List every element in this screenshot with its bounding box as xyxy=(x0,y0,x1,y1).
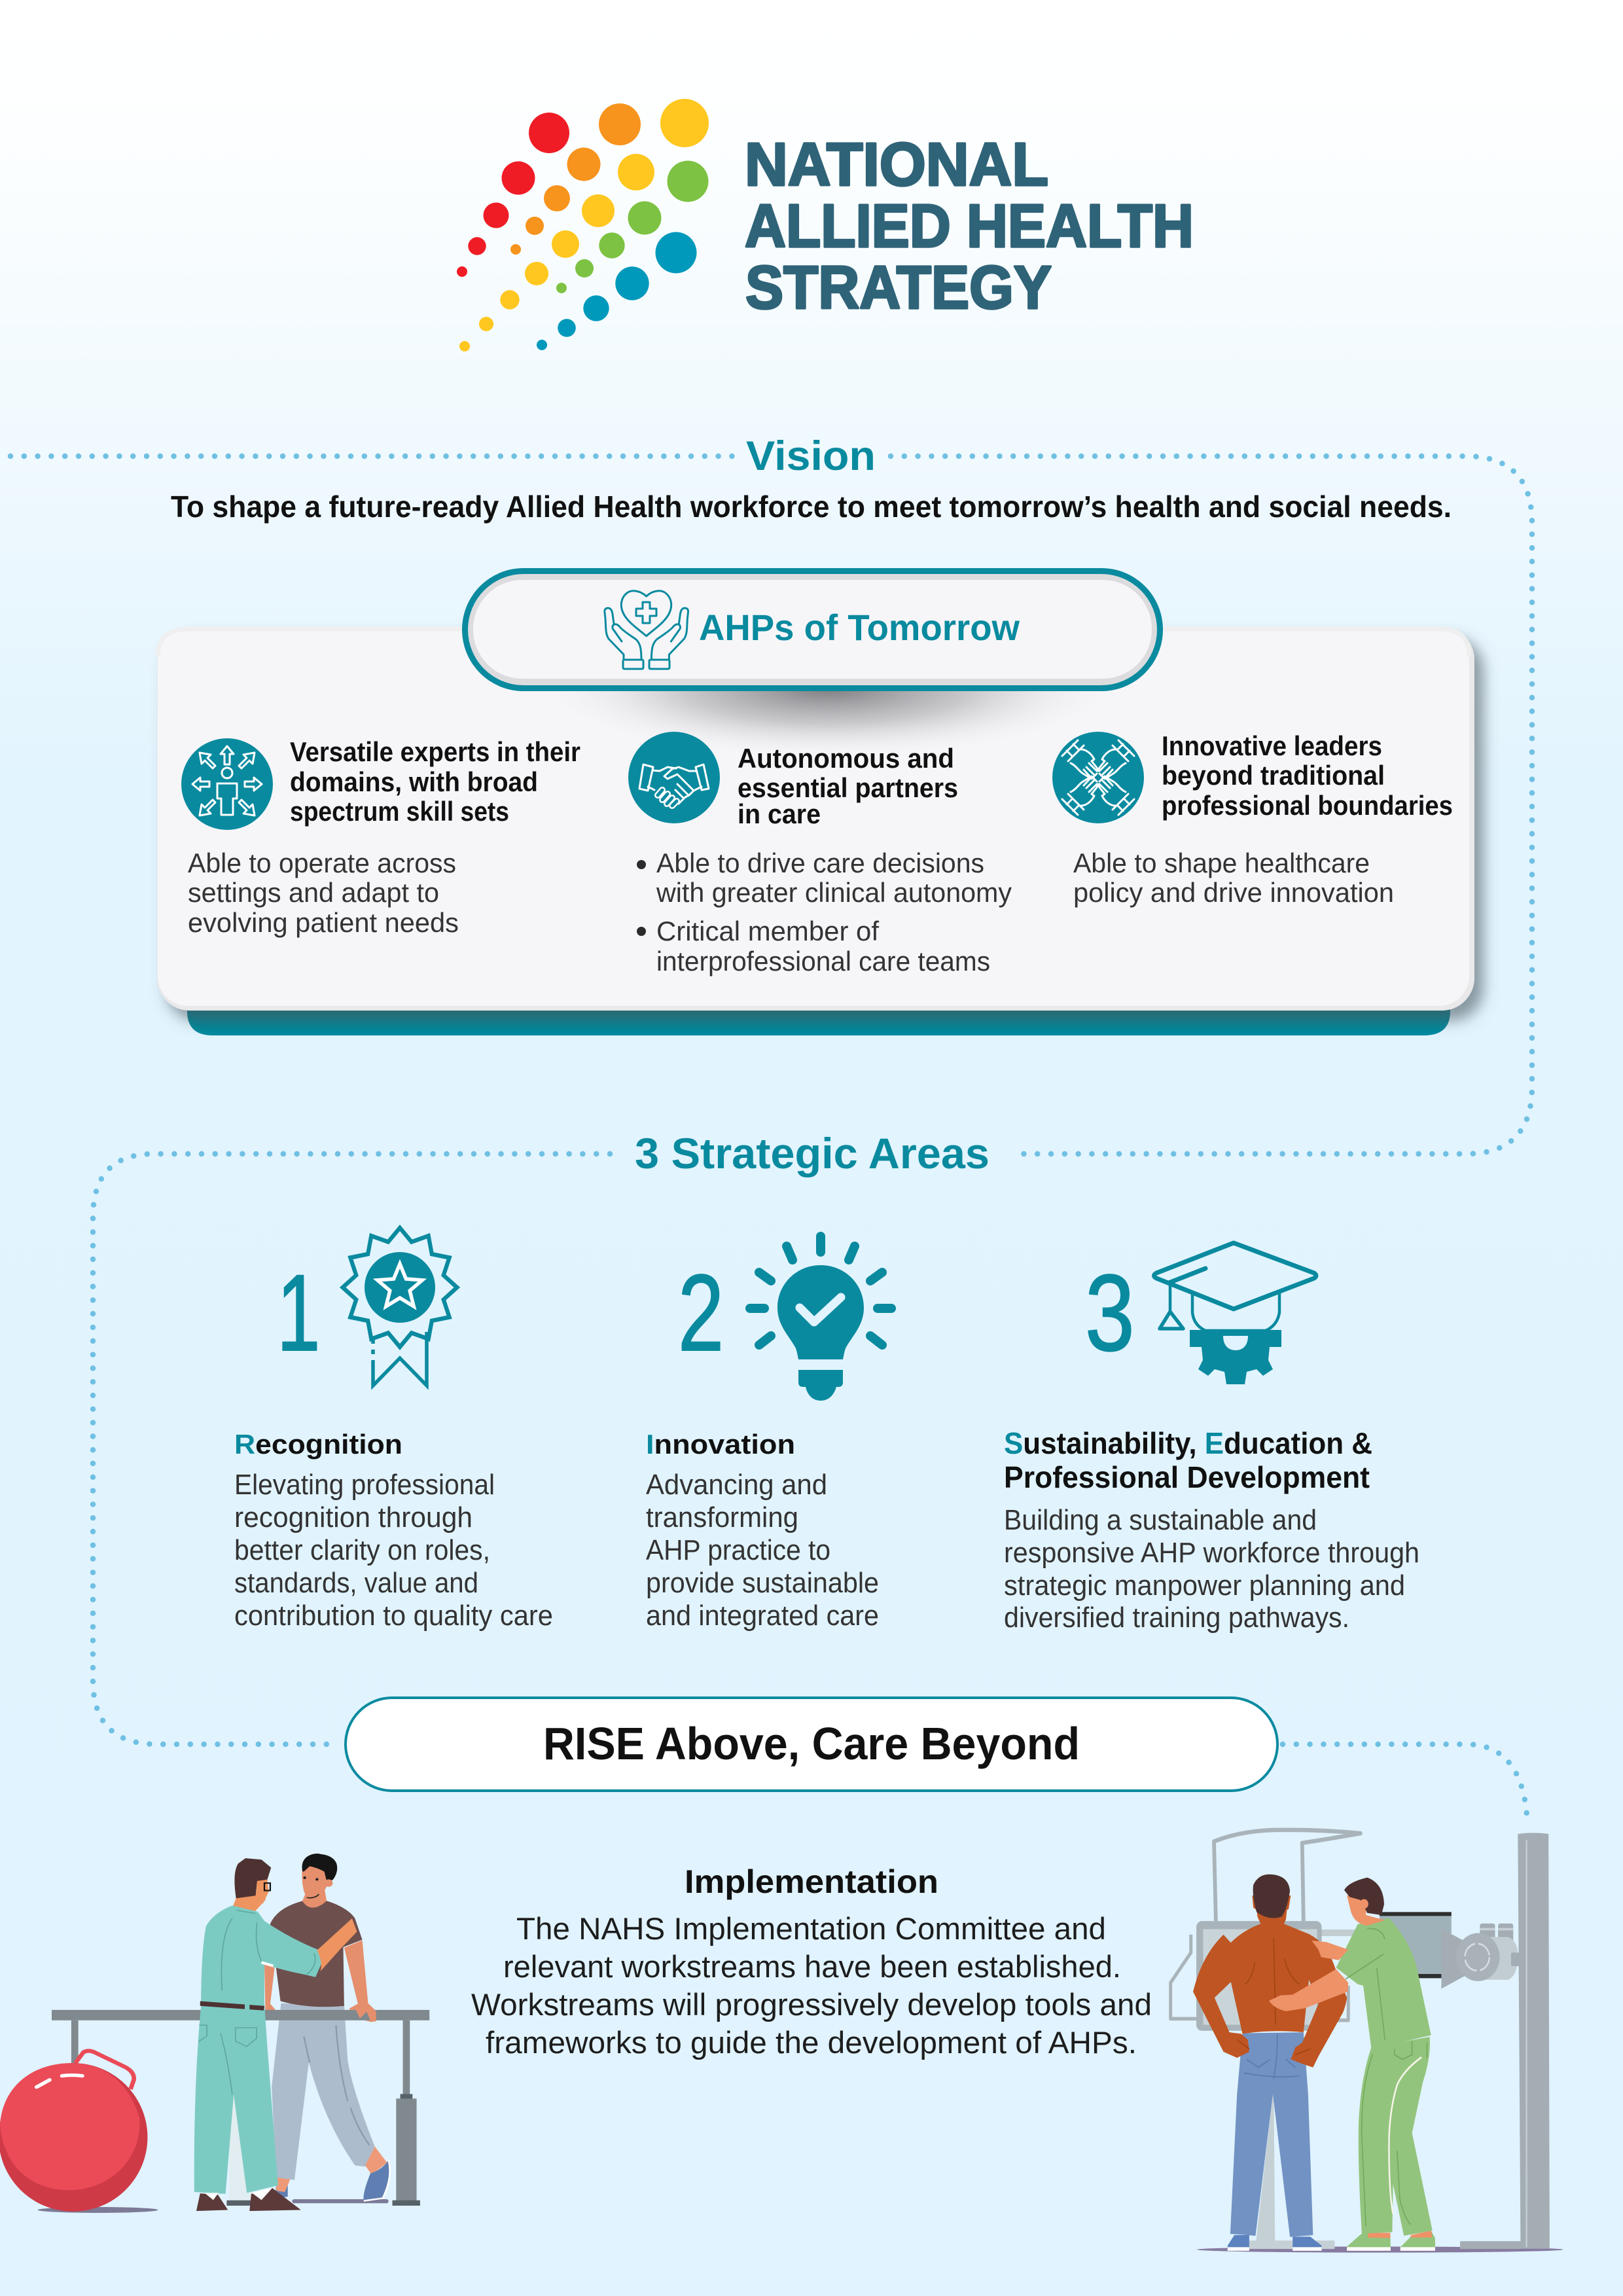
logo: wordmark: STRATEGY xyxy=(745,253,1052,321)
column heading xyxy=(738,743,958,829)
area text: transforming xyxy=(646,1501,798,1534)
parallel bar post right xyxy=(71,2020,420,2206)
column text: Able to operate across xyxy=(188,848,456,878)
pill title: AHPs of Tomorrow xyxy=(699,607,1020,648)
area heading xyxy=(1004,1426,1372,1494)
area text: better clarity on roles, xyxy=(234,1534,490,1566)
column text: settings and adapt to xyxy=(188,877,439,908)
numeral 2: 2 xyxy=(678,1253,724,1374)
column text: policy and drive innovation xyxy=(1073,877,1394,908)
logo: coloured dots xyxy=(457,99,709,351)
column heading: in care xyxy=(738,798,821,829)
column heading: Innovative leaders xyxy=(1162,730,1382,761)
icon: award rosette xyxy=(343,1228,457,1386)
area heading: Recognition xyxy=(234,1429,402,1460)
bullet list: Able to drive care decisions xyxy=(656,848,984,878)
panel base bar xyxy=(187,982,1450,1035)
area text: diversified training pathways. xyxy=(1004,1602,1349,1634)
area heading: Professional Development xyxy=(1004,1460,1370,1494)
area heading: Sustainability, Education & xyxy=(1004,1426,1372,1460)
implementation text xyxy=(471,1863,1152,2060)
pill drop shadow xyxy=(540,618,1116,759)
tagline pill xyxy=(346,1698,1277,1791)
column text: Able to shape healthcare xyxy=(1073,848,1370,878)
illustration: radiographer with patient at x-ray machine xyxy=(1171,1830,1563,2253)
implementation body: Workstreams will progressively develop tools and xyxy=(471,1987,1152,2022)
area text: and integrated care xyxy=(646,1600,879,1632)
column heading: domains, with broad xyxy=(290,766,538,797)
area text: recognition through xyxy=(234,1501,473,1534)
area text: Building a sustainable and xyxy=(1004,1504,1317,1536)
logo: wordmark xyxy=(745,130,1194,321)
area text: standards, value and xyxy=(234,1567,478,1599)
parallel bar rail xyxy=(52,2010,429,2020)
card xyxy=(157,627,1474,1011)
patient right hand xyxy=(355,2004,376,2022)
implementation body xyxy=(471,1911,1152,2060)
icon: handshake xyxy=(628,732,720,823)
area heading: Innovation xyxy=(646,1429,795,1460)
numeral 3: 3 xyxy=(1085,1253,1135,1374)
area text: Elevating professional xyxy=(234,1469,495,1501)
implementation body: frameworks to guide the development of AHPs. xyxy=(486,2025,1137,2060)
area text xyxy=(1004,1504,1419,1634)
area text: AHP practice to xyxy=(646,1534,830,1566)
icon: hands holding heart xyxy=(605,591,688,669)
column heading xyxy=(290,736,580,827)
vision statement: To shape a future-ready Allied Health workforce to meet tomorrow’s health and social needs. xyxy=(171,490,1452,524)
column heading: beyond traditional xyxy=(1162,760,1385,791)
column text xyxy=(188,848,459,938)
area text: strategic manpower planning and xyxy=(1004,1570,1405,1602)
radiographer xyxy=(1269,1878,1435,2251)
therapist xyxy=(194,1858,357,2211)
area 3: Sustainability, Education and Professional Development xyxy=(1004,1426,1419,1634)
heading: Vision: Vision xyxy=(746,433,876,479)
area text xyxy=(646,1469,879,1632)
panel: AHPs of Tomorrow xyxy=(157,568,1474,1035)
tagline pill: RISE Above, Care Beyond xyxy=(543,1718,1080,1769)
bullet list xyxy=(637,848,1012,977)
logo: wordmark: NATIONAL xyxy=(745,130,1048,198)
x-ray tube assembly xyxy=(1380,1912,1518,1988)
heading: 3 Strategic Areas: 3 Strategic Areas xyxy=(635,1129,990,1177)
numeral 1: 1 xyxy=(277,1252,320,1374)
column text: evolving patient needs xyxy=(188,907,459,938)
column 1: versatile experts xyxy=(181,736,580,938)
bullet list: Critical member of xyxy=(656,916,879,946)
implementation body: The NAHS Implementation Committee and xyxy=(516,1911,1106,1946)
column 2: autonomous partners xyxy=(628,732,1012,977)
icon: light bulb with tick xyxy=(750,1236,891,1401)
column heading: Versatile experts in their xyxy=(290,736,580,767)
bullet list: with greater clinical autonomy xyxy=(656,877,1012,908)
icon: graduation cap with gear xyxy=(1154,1243,1316,1384)
column 3: innovative leaders xyxy=(1052,730,1453,908)
heading pill xyxy=(462,568,1163,691)
icon: four joined hands xyxy=(1052,732,1144,823)
area text: contribution to quality care xyxy=(234,1600,553,1632)
column text xyxy=(1073,848,1394,908)
column heading: essential partners xyxy=(738,772,958,803)
detector frame xyxy=(1171,1830,1364,2249)
icon: person with arrows xyxy=(181,738,273,830)
column heading: spectrum skill sets xyxy=(290,796,509,827)
area 1: Recognition xyxy=(234,1429,553,1632)
area text: responsive AHP workforce through xyxy=(1004,1537,1419,1569)
implementation heading: Implementation xyxy=(685,1863,938,1900)
bullet list: interprofessional care teams xyxy=(656,946,990,977)
area 2: Innovation xyxy=(646,1429,879,1632)
floor shadow xyxy=(1197,2246,1563,2253)
machine column xyxy=(1460,1833,1550,2249)
shadows xyxy=(38,2207,158,2213)
implementation body: relevant workstreams have been established. xyxy=(503,1949,1121,1984)
parallel bar rear post xyxy=(229,2094,251,2201)
area text: provide sustainable xyxy=(646,1567,879,1599)
column heading: professional boundaries xyxy=(1162,790,1453,821)
column heading: Autonomous and xyxy=(738,743,954,774)
area text: Advancing and xyxy=(646,1469,827,1501)
exercise ball xyxy=(0,2051,147,2212)
patient xyxy=(1193,1874,1347,2251)
illustration: physiotherapist with patient at parallel bars xyxy=(0,1854,429,2213)
patient xyxy=(264,1854,390,2201)
logo: wordmark: ALLIED HEALTH xyxy=(745,192,1194,260)
column heading xyxy=(1162,730,1453,821)
area text xyxy=(234,1469,553,1632)
